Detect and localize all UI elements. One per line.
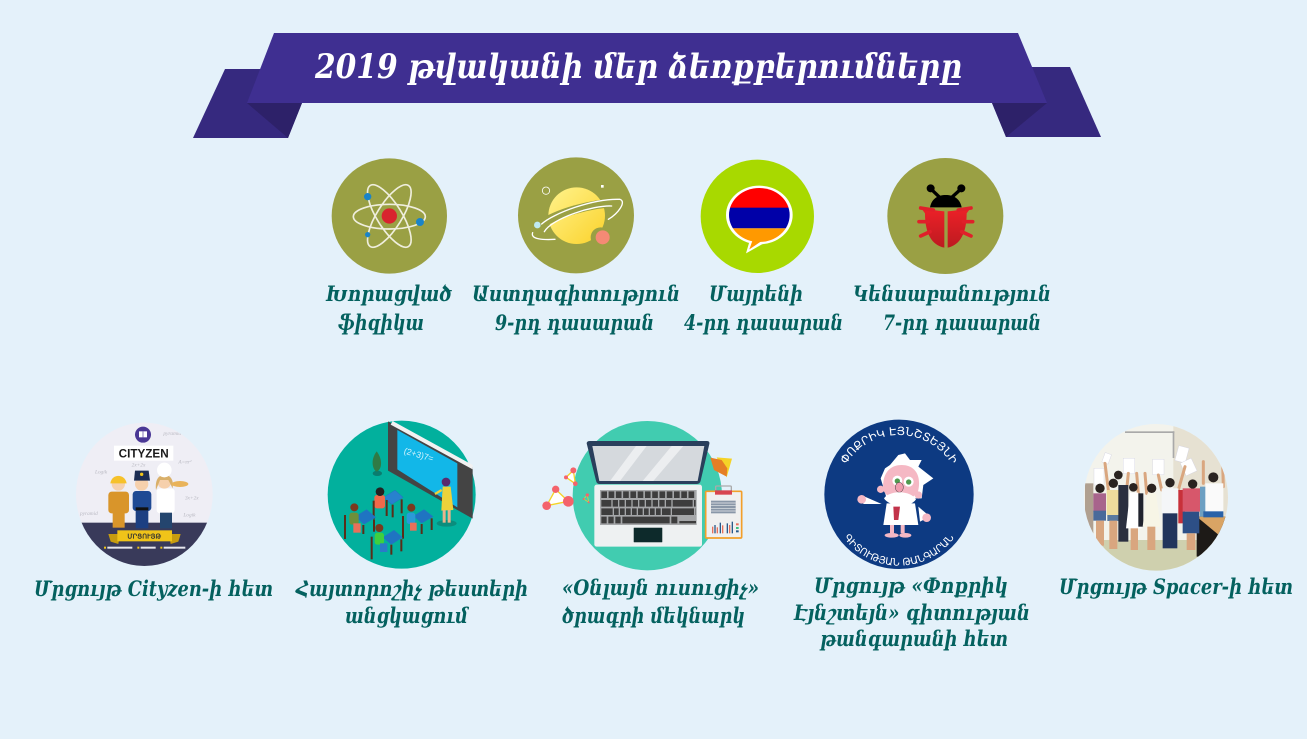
image: Cityzen poster: Logik	[182, 513, 196, 519]
icon: flag speech bubble	[701, 160, 814, 273]
image: classroom with giant tablet	[328, 421, 476, 569]
firefighter	[108, 476, 129, 528]
panel: diagnostic tests	[295, 421, 528, 628]
panel: Spacer contest	[1059, 423, 1293, 599]
panel: biology	[853, 158, 1051, 335]
logo: Little Einstein science museum: ՓՈՔՐԻԿ ԷՅՆՇՏԵՅՆԻ	[842, 426, 956, 463]
label: advanced physics: Խորացված	[325, 281, 452, 306]
label: native language: 4-րդ դասարան	[684, 310, 843, 335]
panel: astronomy	[472, 157, 680, 335]
label: diagnostic tests: Հայտորոշիչ թեստերի	[295, 576, 528, 601]
label: online teacher	[562, 575, 759, 628]
label: biology	[853, 281, 1051, 335]
image: Cityzen poster: 3x+2x	[185, 495, 199, 501]
label: Cityzen contest: Մրցույթ Cityzen-ի հետ	[34, 576, 273, 601]
label: online teacher: ծրագրի մեկնարկ	[562, 603, 745, 628]
label: diagnostic tests	[295, 576, 528, 628]
panel: Cityzen contest	[34, 420, 273, 601]
teacher	[435, 478, 457, 527]
label: astronomy: 9-րդ դասարան	[495, 310, 654, 335]
title: 2019 թվականի մեր ձեռքբերումները	[314, 47, 962, 87]
chef	[156, 463, 188, 528]
label: Little Einstein	[793, 573, 1030, 651]
students at desks	[344, 487, 433, 559]
title banner	[193, 33, 1101, 138]
label: advanced physics	[325, 281, 452, 335]
image: classroom with giant tablet: (2+3)7=	[403, 446, 435, 464]
label: Little Einstein: Մրցույթ «Փոքրիկ	[814, 573, 1008, 598]
panel: online teacher	[542, 421, 759, 628]
police officer	[133, 471, 151, 528]
image: Cityzen poster: 2x+2x	[132, 463, 146, 469]
panel: Little Einstein	[793, 420, 1030, 651]
label: astronomy	[472, 281, 680, 335]
icon: ladybug	[887, 158, 1003, 274]
label: online teacher: «Օնլայն ուսուցիչ»	[562, 575, 759, 600]
label: Little Einstein: թանգարանի հետ	[819, 626, 1008, 651]
icon: atom	[332, 158, 447, 274]
image: Cityzen poster: CITYZEN	[119, 448, 169, 461]
image: Cityzen poster: ՄՐՑՈՒՅԹ	[127, 532, 162, 540]
image: Cityzen poster: pyramid	[79, 511, 98, 517]
icon: ringed planet	[518, 157, 634, 273]
label: advanced physics: ֆիզիկա	[338, 310, 424, 335]
label: astronomy: Աստղագիտություն	[472, 281, 680, 306]
logo: Little Einstein science museum	[824, 420, 974, 569]
label: biology: Կենսաբանություն	[853, 281, 1051, 306]
image: Cityzen poster	[73, 420, 217, 568]
image: Cityzen poster: A=πr²	[177, 459, 192, 465]
label: native language: Մայրենի	[709, 281, 803, 306]
label: Little Einstein: Էյնշտեյն» գիտության	[793, 600, 1030, 625]
label: native language	[684, 281, 843, 335]
image: Cityzen poster: Logik	[94, 469, 108, 475]
image: Cityzen poster: pyramid	[162, 431, 181, 437]
image: laptop with clipboard and molecules	[542, 421, 742, 570]
logo: Little Einstein science museum: ԳԻՏՈՒԹՅԱՆ ԹԱՆԳԱՐԱՆ	[846, 534, 954, 566]
panel: advanced physics	[325, 158, 452, 335]
panel: native language	[684, 160, 843, 335]
label: biology: 7-րդ դասարան	[883, 310, 1041, 335]
image: group photo of children	[1083, 423, 1230, 572]
label: diagnostic tests: անցկացում	[345, 603, 470, 628]
